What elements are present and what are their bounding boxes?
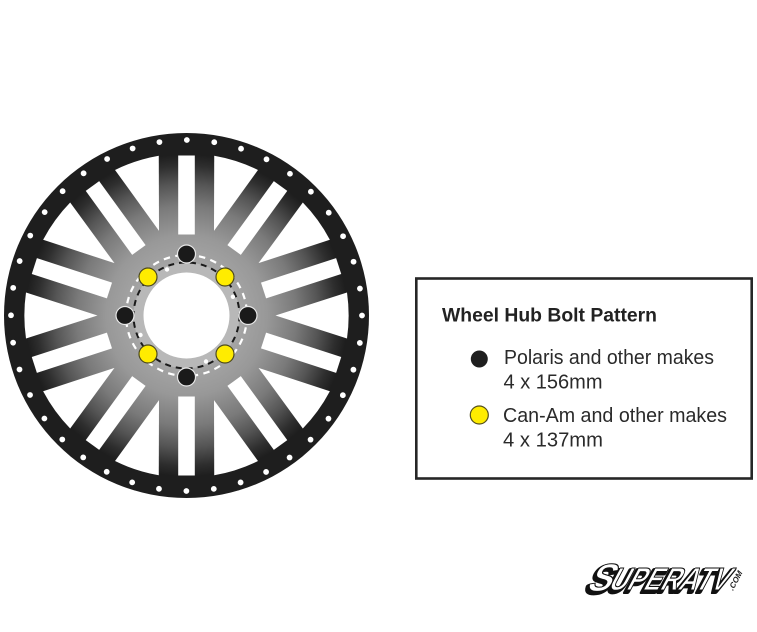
small white hub dots (138, 267, 235, 364)
logo initial shadow: S (579, 557, 626, 601)
legend item: Can-Am (470, 405, 727, 452)
yellow bolts: 4 x 137mm (139, 268, 234, 363)
slot windows (32, 156, 341, 476)
legend title: Wheel Hub Bolt Pattern (442, 304, 657, 326)
white dashed bolt circle (126, 255, 247, 376)
black bolts: 4 x 156mm (116, 245, 257, 386)
light hub ring (134, 262, 240, 368)
legend item: Polaris (471, 347, 714, 394)
center bore (144, 272, 230, 358)
logo .com: .COM (727, 569, 745, 592)
SuperATV logo (579, 555, 745, 601)
rim holes (11, 140, 362, 491)
legend panel (416, 278, 752, 478)
legend item: Can-Am: Can-Am and other makes (503, 405, 727, 427)
wheel disc and rim (4, 133, 369, 498)
wedge windows (24, 154, 349, 477)
legend item: Polaris: Polaris and other makes (504, 347, 714, 369)
black dashed bolt circle (134, 262, 240, 368)
wheel diagram (4, 133, 369, 498)
legend border (416, 278, 752, 478)
legend item: Polaris: 4 x 156mm (504, 372, 602, 394)
legend item: Can-Am: 4 x 137mm (503, 430, 603, 452)
logo initial: S (581, 555, 628, 599)
